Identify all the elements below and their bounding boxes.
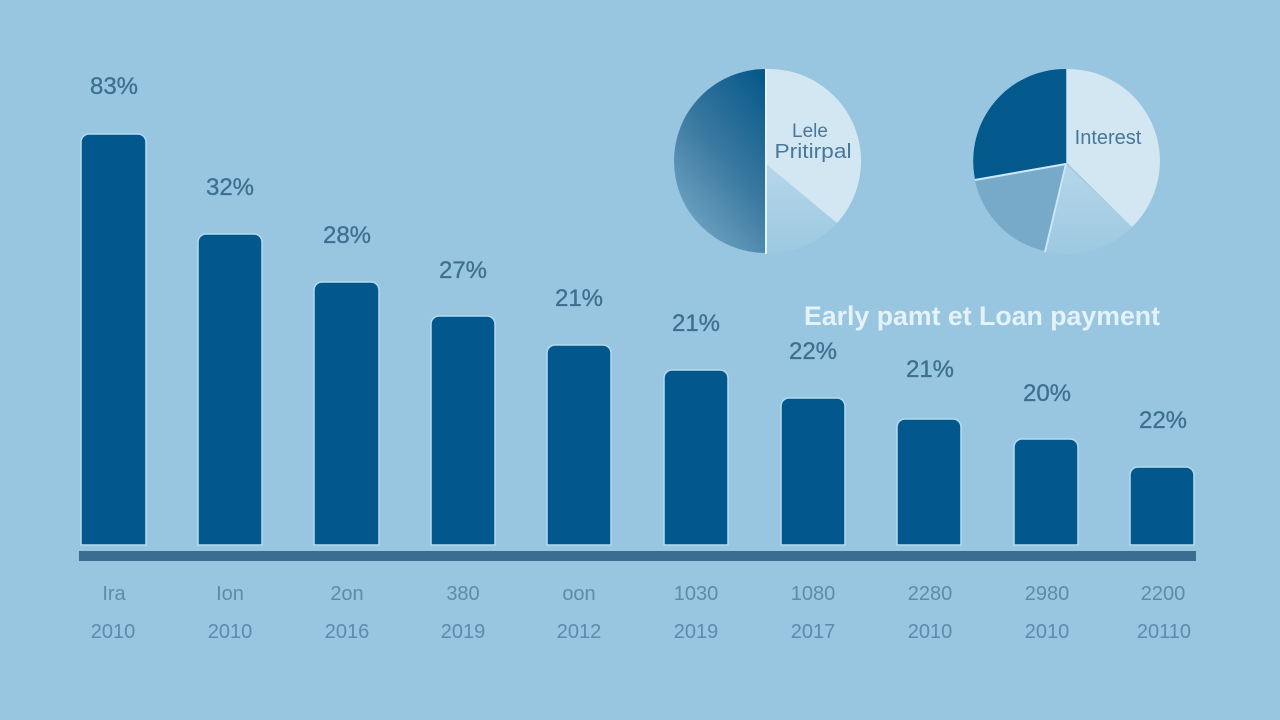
year labels: 2012: [557, 621, 601, 643]
heading: Early pamt et Loan payment: [804, 301, 1160, 331]
category labels: Ira: [102, 583, 127, 605]
divider: [765, 69, 767, 254]
category labels: 1030: [674, 583, 718, 605]
bar 5: [547, 345, 611, 545]
category labels: Ion: [216, 583, 244, 605]
chart axis: [79, 551, 1196, 561]
bar 8: [897, 419, 961, 545]
percentage labels: 22%: [1139, 407, 1187, 434]
percentage labels: 28%: [323, 222, 371, 249]
year labels: [91, 621, 1191, 643]
bar 4: [431, 316, 495, 545]
percentage labels: 32%: [206, 174, 254, 201]
divider: [975, 164, 1066, 252]
large pale slice: [767, 69, 861, 223]
percentage labels: 21%: [672, 310, 720, 337]
lower light slice: [767, 165, 837, 253]
category labels: 2on: [330, 583, 364, 605]
medium slice: [975, 165, 1066, 251]
percentage labels: [90, 73, 1187, 434]
bar 6: [664, 370, 728, 545]
bar 10: [1130, 467, 1194, 545]
percentage labels: 21%: [555, 285, 603, 312]
lower light slice: [1046, 165, 1132, 254]
bar 9: [1014, 439, 1078, 545]
large pale slice: [1067, 69, 1160, 227]
year labels: 2010: [208, 621, 252, 643]
year labels: 20110: [1137, 621, 1191, 643]
category labels: oon: [562, 583, 596, 605]
year labels: 2010: [91, 621, 135, 643]
category labels: 1080: [791, 583, 835, 605]
bar 2: [198, 234, 262, 545]
pie chart: principal: [674, 69, 861, 254]
category labels: 2280: [908, 583, 952, 605]
bar 1: [81, 134, 146, 545]
pie label: Lele: [792, 121, 828, 142]
percentage labels: 27%: [439, 257, 487, 284]
category labels: 2980: [1025, 583, 1069, 605]
year labels: 2016: [325, 621, 369, 643]
percentage labels: 22%: [789, 338, 837, 365]
percentage labels: 83%: [90, 73, 138, 100]
year labels: 2019: [674, 621, 718, 643]
year labels: 2019: [441, 621, 485, 643]
percentage labels: 20%: [1023, 380, 1071, 407]
dark half slice: [674, 69, 766, 253]
dark slice: [973, 69, 1066, 179]
category labels: 2200: [1141, 583, 1185, 605]
bar 7: [781, 398, 845, 545]
category labels: [102, 583, 1185, 605]
pie label: Pritirpal: [774, 141, 852, 163]
category labels: 380: [446, 583, 480, 605]
bar chart: [81, 134, 1194, 545]
pie chart: interest: [973, 69, 1160, 254]
year labels: 2010: [1025, 621, 1069, 643]
pie label: Interest: [1075, 127, 1142, 149]
percentage labels: 21%: [906, 356, 954, 383]
year labels: 2010: [908, 621, 952, 643]
year labels: 2017: [791, 621, 835, 643]
bar 3: [314, 282, 379, 545]
